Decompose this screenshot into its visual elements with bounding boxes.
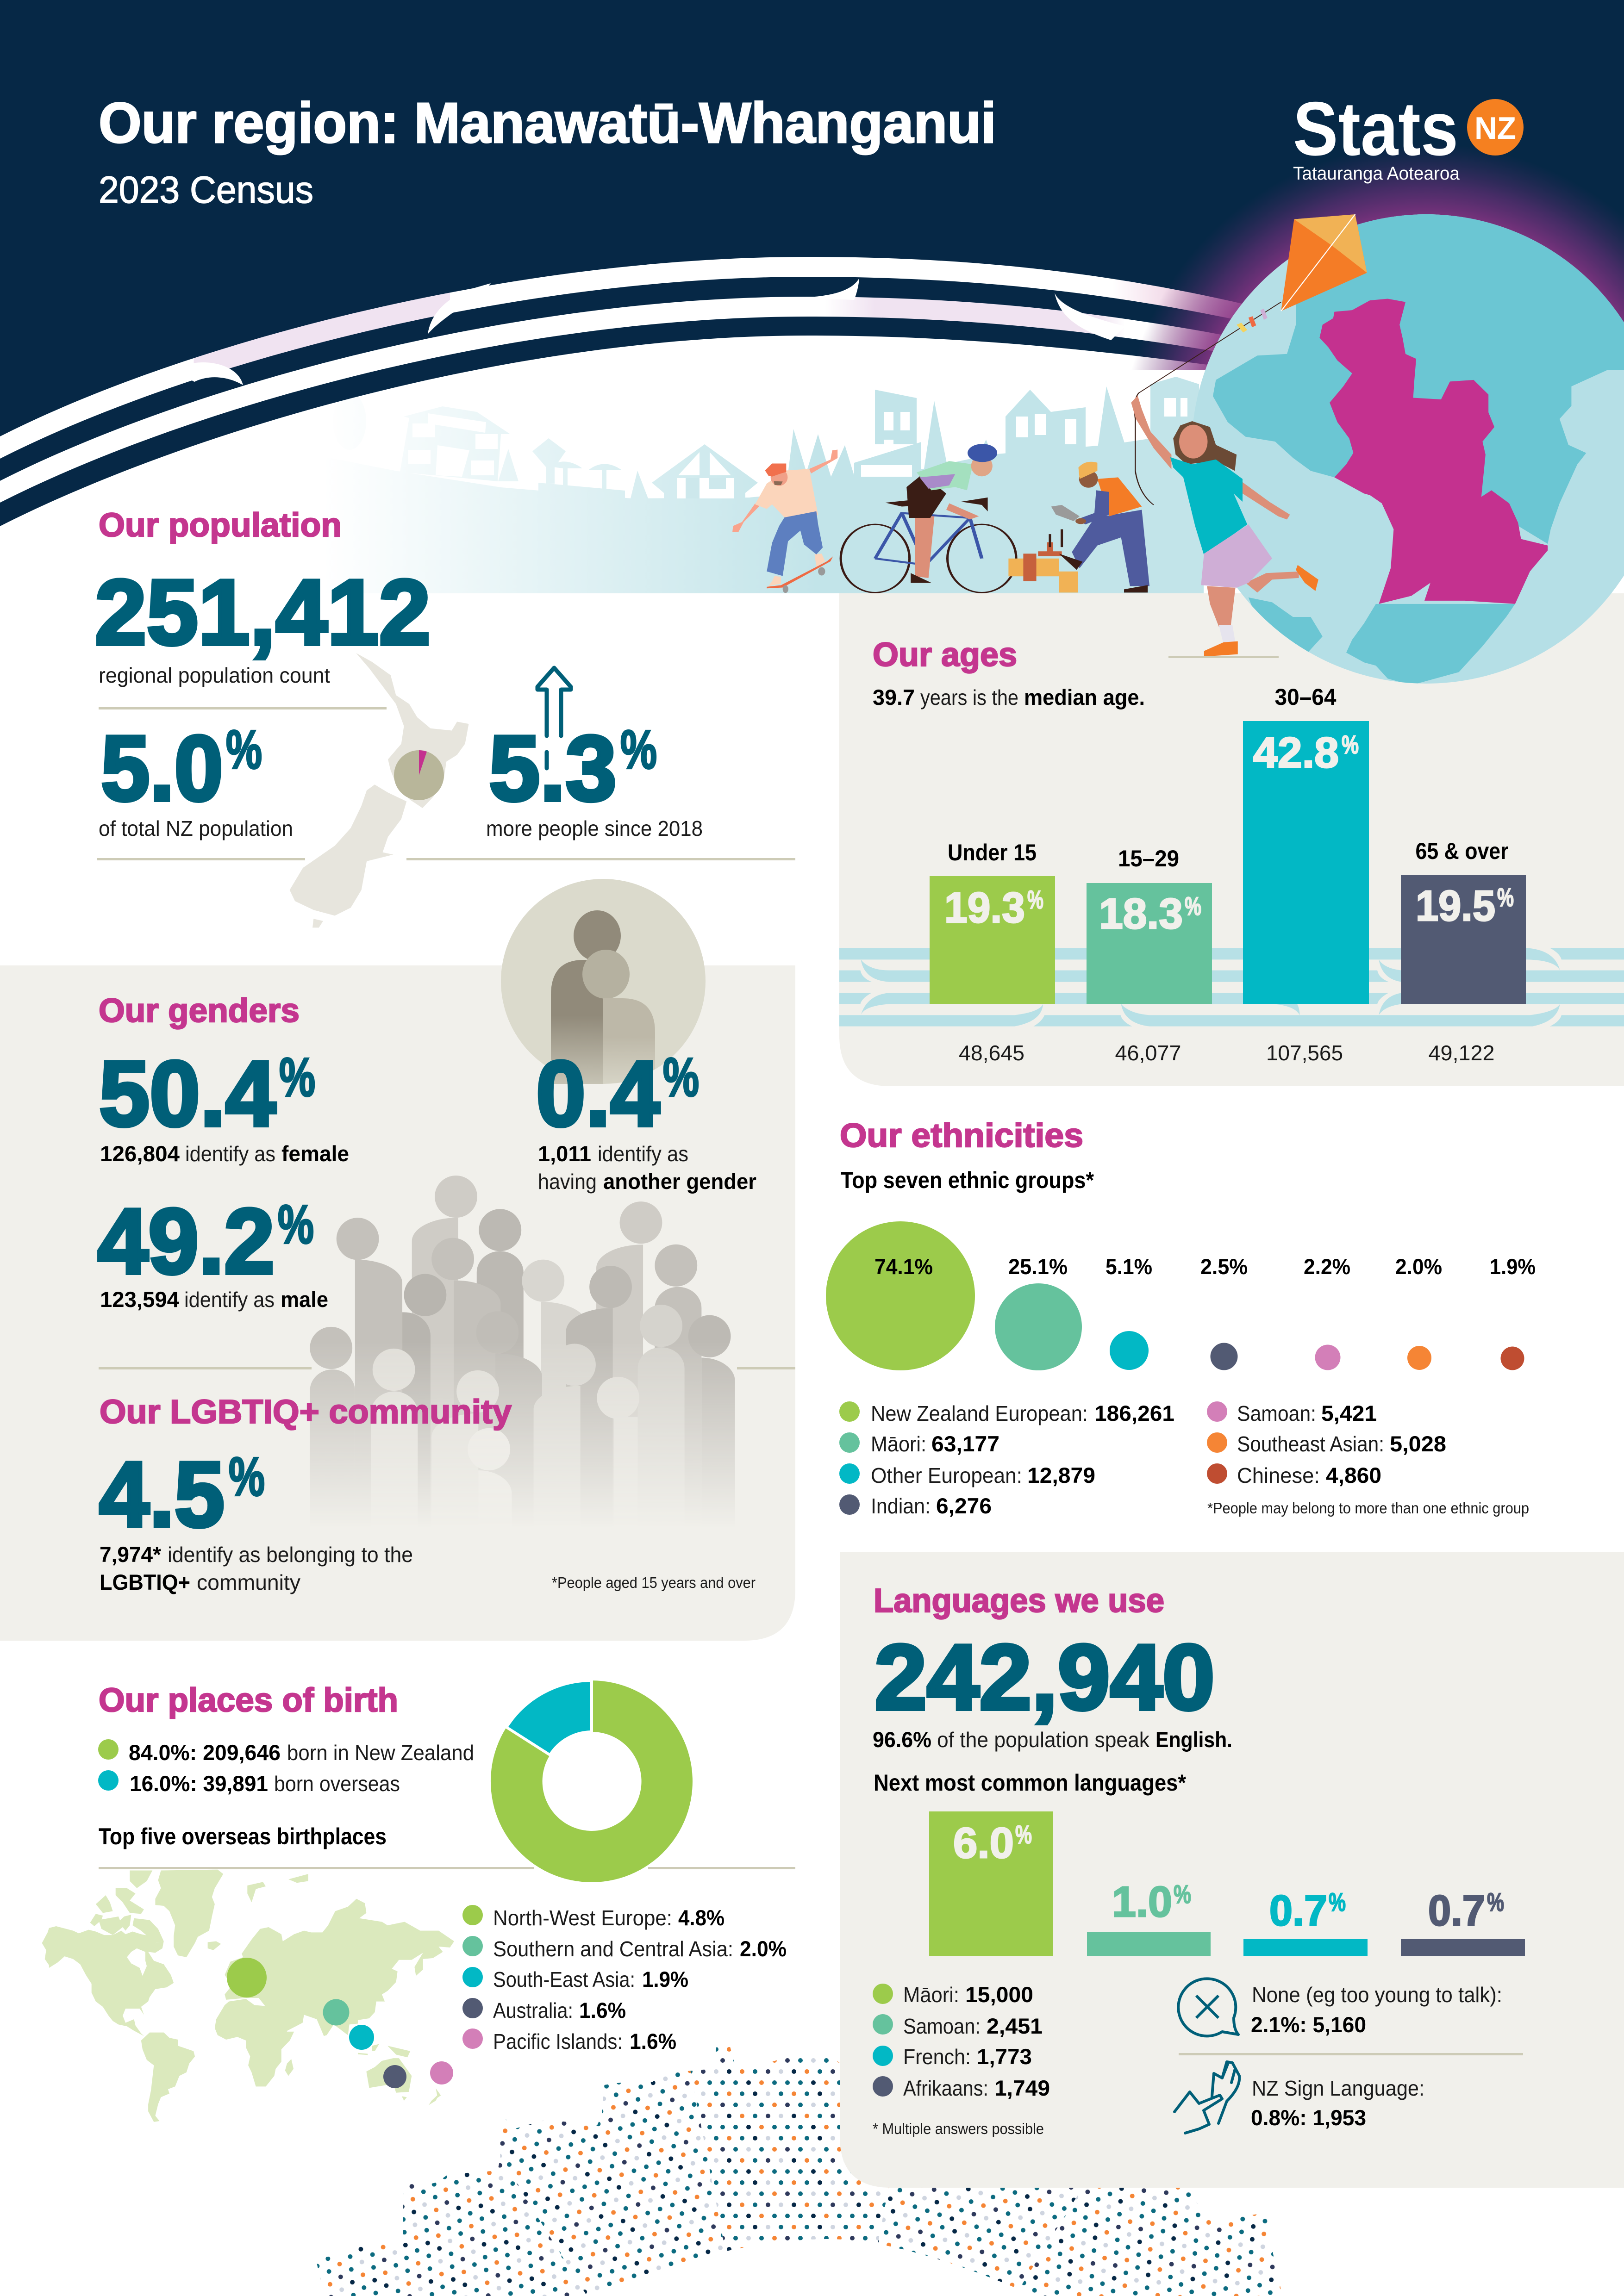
bar chart: age groups: 107,565 [1266, 1041, 1343, 1065]
legend: languages: Samoan: [903, 2014, 981, 2038]
heading: Our ethnicities [840, 1117, 1083, 1154]
donut chart [491, 1680, 693, 1882]
bubble chart: 74.1% [874, 1254, 933, 1279]
legend: top overseas birthplaces: North-West Europe: [493, 1906, 672, 1930]
NZ Sign Language stat: 0.8%: 1,953 [1251, 2105, 1366, 2130]
bar chart: languages: % [1174, 1879, 1191, 1909]
legend: languages [873, 1982, 1050, 2100]
heading: Our ages [873, 636, 1017, 673]
figure: skater [732, 449, 837, 593]
icon: signing hands [1174, 2062, 1239, 2133]
bar chart: age groups: 42.8 [1253, 728, 1339, 777]
legend: top overseas birthplaces: 1.9% [642, 1967, 688, 1991]
bar chart: age groups: 48,645 [959, 1041, 1024, 1065]
bar chart: age groups: 18.3 [1099, 890, 1183, 938]
NZ map with regional pie [290, 653, 469, 927]
caption: of total NZ population [99, 816, 293, 840]
legend: top overseas birthplaces: Southern and Central Asia: [493, 1937, 733, 1961]
stat: 49.2% male: 123,594 [100, 1287, 179, 1312]
panel: our ethnicities [826, 1117, 1536, 1518]
bar chart: age groups: 65 & over [1416, 838, 1508, 864]
panel: languages we use [840, 1552, 1624, 2188]
icon: kite [1135, 214, 1367, 505]
heading: Languages we use [874, 1582, 1164, 1619]
legend: ethnic groups: 4,860 [1326, 1463, 1381, 1487]
figure: cyclist [841, 444, 1016, 592]
legend: NZ born vs overseas: 84.0%: 209,646 [129, 1740, 281, 1765]
legend: NZ born vs overseas: 16.0%: 39,891 [130, 1771, 268, 1796]
stat: 50.4% female [99, 1042, 349, 1166]
bar chart: age groups: 15–29 [1118, 846, 1179, 871]
genders text [98, 992, 756, 1312]
legend: top overseas birthplaces: 1.6% [630, 2029, 676, 2053]
legend: NZ born vs overseas: born in New Zealand [287, 1741, 474, 1765]
description [100, 1542, 413, 1594]
stat: 4.5%: 4.5 [99, 1443, 225, 1546]
legend: ethnic groups: Other European: [871, 1463, 1022, 1487]
legend: languages: 2,451 [987, 2014, 1043, 2038]
median age: years is the [920, 685, 1018, 709]
legend: ethnic groups: 5,028 [1390, 1431, 1446, 1456]
globe with region map [1192, 205, 1624, 685]
subtitle: 2023 Census [99, 169, 313, 211]
ground line under girl [1168, 656, 1279, 658]
legend: top overseas birthplaces: 2.0% [740, 1936, 787, 1961]
panel: our ages background [839, 593, 1624, 1086]
legend: ethnic groups: 12,879 [1027, 1463, 1095, 1487]
scene: ground and town skyline [278, 377, 1204, 593]
logo: Stats NZ: Stats [1293, 86, 1458, 171]
legend: ethnic groups: New Zealand European: [871, 1401, 1088, 1425]
stat: 49.2% male: 49.2 [98, 1190, 275, 1293]
no-language stat: None (eg too young to talk): [1252, 1983, 1502, 2007]
stat: 50.4% female: identify as [185, 1142, 275, 1166]
panel: our ages content [839, 636, 1624, 1065]
stat: 50.4% female: % [279, 1047, 315, 1108]
stat: 0.4% another gender [536, 1042, 756, 1194]
legend: ethnic groups: Samoan: [1237, 1401, 1316, 1425]
stat: 49.2% male [98, 1190, 328, 1312]
bar chart: languages: % [1487, 1887, 1504, 1916]
stat: 5.3%: 5.3 [489, 717, 617, 820]
dotted arc pattern [317, 2047, 1281, 2296]
median age: 39.7 [873, 685, 915, 709]
heading: Our LGBTIQ+ community [100, 1394, 512, 1431]
icon: up arrow [537, 668, 571, 768]
bar chart: age groups: % [1185, 891, 1201, 921]
bubble chart: 25.1% [1008, 1254, 1068, 1279]
bar chart: languages: 6.0 [953, 1819, 1014, 1867]
bar chart: age groups: % [1027, 885, 1043, 914]
bar chart: age groups: 19.3 [944, 884, 1025, 932]
panel: our places of birth [42, 1680, 795, 2122]
world map [42, 1870, 454, 2122]
stat: 0.4% another gender: having [538, 1170, 597, 1194]
stat: 50.4% female: female [281, 1141, 349, 1166]
bar chart: age groups: % [1342, 730, 1359, 759]
legend: top overseas birthplaces: Australia: [493, 1998, 573, 2022]
legend: top overseas birthplaces: South-East Asia: [493, 1967, 635, 1991]
bar chart: languages [929, 1811, 1525, 1956]
stat: 5.0%: 5.0 [101, 717, 223, 820]
bar chart: languages: % [1329, 1887, 1346, 1916]
figure: worker with wrench [1008, 462, 1149, 592]
panel: our genders and LGBTIQ+ [0, 965, 795, 1641]
English speakers count: 242,940 [874, 1626, 1215, 1729]
bar chart: age groups: Under 15 [948, 840, 1037, 865]
river pattern behind bars [839, 948, 1624, 1027]
median age: median age. [1024, 685, 1145, 709]
bar chart: languages: 0.7 [1428, 1886, 1485, 1935]
footnote: * Multiple answers possible [873, 2120, 1044, 2137]
English share [873, 1727, 1232, 1752]
lower arc band [0, 297, 1250, 503]
footnote: *People aged 15 years and over [552, 1574, 756, 1591]
no-language stat: 2.1%: 5,160 [1251, 2012, 1366, 2037]
legend: ethnic groups: 6,276 [936, 1493, 992, 1518]
description: 7,974* [100, 1542, 162, 1567]
stat: 5.3%: % [620, 719, 657, 780]
legend: ethnic groups: 63,177 [931, 1431, 999, 1456]
heading: Our places of birth [99, 1682, 398, 1719]
bar chart: age groups: 46,077 [1115, 1041, 1181, 1065]
bar chart: age groups: 30–64 [1275, 684, 1337, 710]
stat: 0.4% another gender: % [663, 1047, 699, 1108]
NZ Sign Language stat: NZ Sign Language: [1252, 2076, 1424, 2100]
NZ Sign Language stat [1251, 2076, 1424, 2130]
caption: more people since 2018 [486, 816, 703, 840]
legend: ethnic groups [839, 1401, 1446, 1518]
heading: Our population [99, 507, 342, 544]
footnote: *People may belong to more than one ethnic group [1207, 1500, 1529, 1517]
subheading: Top five overseas birthplaces [99, 1823, 387, 1849]
stat: 0.4% another gender: identify as [598, 1142, 688, 1166]
legend: languages: French: [903, 2045, 971, 2069]
subheading: Next most common languages* [874, 1770, 1186, 1796]
legend: NZ born vs overseas [98, 1739, 474, 1796]
stat: 49.2% male: % [278, 1194, 314, 1255]
English share: of the population speak [937, 1728, 1150, 1752]
bar chart: age groups: 19.5 [1416, 882, 1495, 930]
bar chart: languages: % [1015, 1820, 1032, 1849]
legend: ethnic groups: 186,261 [1094, 1401, 1174, 1425]
no-language stat [1251, 1983, 1502, 2037]
legend: languages: 15,000 [965, 1982, 1033, 2007]
bubble chart: 2.0% [1395, 1254, 1442, 1279]
top arc band [0, 257, 1250, 459]
legend: ethnic groups: 5,421 [1321, 1401, 1377, 1425]
English share: English. [1156, 1727, 1232, 1752]
legend: languages: Māori: [903, 1983, 959, 2007]
legend: ethnic groups: Southeast Asian: [1237, 1432, 1384, 1456]
icon: another gender figures [501, 879, 706, 1084]
stat: 5.0%: % [226, 719, 262, 780]
bar chart: languages: 1.0 [1112, 1878, 1172, 1926]
stat: 4.5%: % [229, 1446, 265, 1507]
bar chart: languages: 0.7 [1269, 1886, 1327, 1935]
English share: 96.6% [873, 1727, 931, 1752]
title: Our region: Manawatū-Whanganui [99, 92, 996, 155]
header navy background [0, 0, 1624, 526]
bar chart: age groups: % [1497, 883, 1514, 912]
LGBTIQ+ text [99, 1394, 756, 1594]
heading: Our genders [99, 992, 300, 1029]
region: Manawatū-Whanganui [1319, 299, 1548, 604]
legend: NZ born vs overseas: born overseas [274, 1772, 400, 1796]
globe glow [1134, 150, 1624, 370]
bar chart: age groups: 49,122 [1429, 1041, 1494, 1065]
subheading: Top seven ethnic groups* [841, 1167, 1094, 1193]
figure: girl flying kite [1131, 396, 1318, 657]
description: identify as belonging to the [168, 1543, 413, 1567]
stat: 0.4% another gender: 0.4 [536, 1042, 660, 1145]
bar chart: age groups [930, 684, 1526, 1065]
woven white arcs [0, 257, 1250, 503]
logo: Stats NZ: NZ [1474, 111, 1516, 146]
logo: Stats NZ: Tatauranga Aotearoa [1293, 163, 1460, 184]
description: LGBTIQ+ [100, 1570, 190, 1594]
legend: top overseas birthplaces [462, 1905, 787, 2053]
caption: regional population count [99, 663, 330, 687]
bubble chart [826, 1221, 1536, 1370]
legend: top overseas birthplaces: 4.8% [678, 1905, 725, 1930]
median age [873, 685, 1145, 709]
panel: our population [95, 507, 795, 927]
stat: 0.4% another gender: another gender [603, 1169, 756, 1194]
legend: languages: 1,773 [977, 2044, 1032, 2069]
legend: top overseas birthplaces: 1.6% [579, 1998, 626, 2022]
stat: 0.4% another gender: 1,011 [538, 1141, 591, 1166]
bubble chart: 2.5% [1200, 1254, 1248, 1279]
legend: ethnic groups: Chinese: [1237, 1463, 1320, 1487]
legend: languages: 1,749 [994, 2076, 1050, 2100]
illustration: people and kite [841, 214, 1367, 657]
legend: ethnic groups: Māori: [871, 1432, 926, 1456]
bubble chart: 1.9% [1490, 1254, 1536, 1279]
legend: ethnic groups: Indian: [871, 1494, 931, 1518]
bubble chart: 5.1% [1106, 1254, 1152, 1279]
icon: speech bubble with cross [1178, 1979, 1238, 2036]
population count: 251,412 [95, 561, 431, 664]
legend: top overseas birthplaces: Pacific Islands: [493, 2029, 623, 2053]
stat: 49.2% male: male [281, 1287, 328, 1312]
legend: languages: Afrikaans: [903, 2076, 988, 2100]
stat: 50.4% female: 50.4 [99, 1042, 276, 1145]
stat: 50.4% female: 126,804 [100, 1141, 180, 1166]
illustration: crowd of people [310, 1176, 735, 1528]
stat: 49.2% male: identify as [184, 1288, 275, 1312]
description: community [197, 1570, 300, 1594]
bubble chart: 2.2% [1304, 1254, 1350, 1279]
